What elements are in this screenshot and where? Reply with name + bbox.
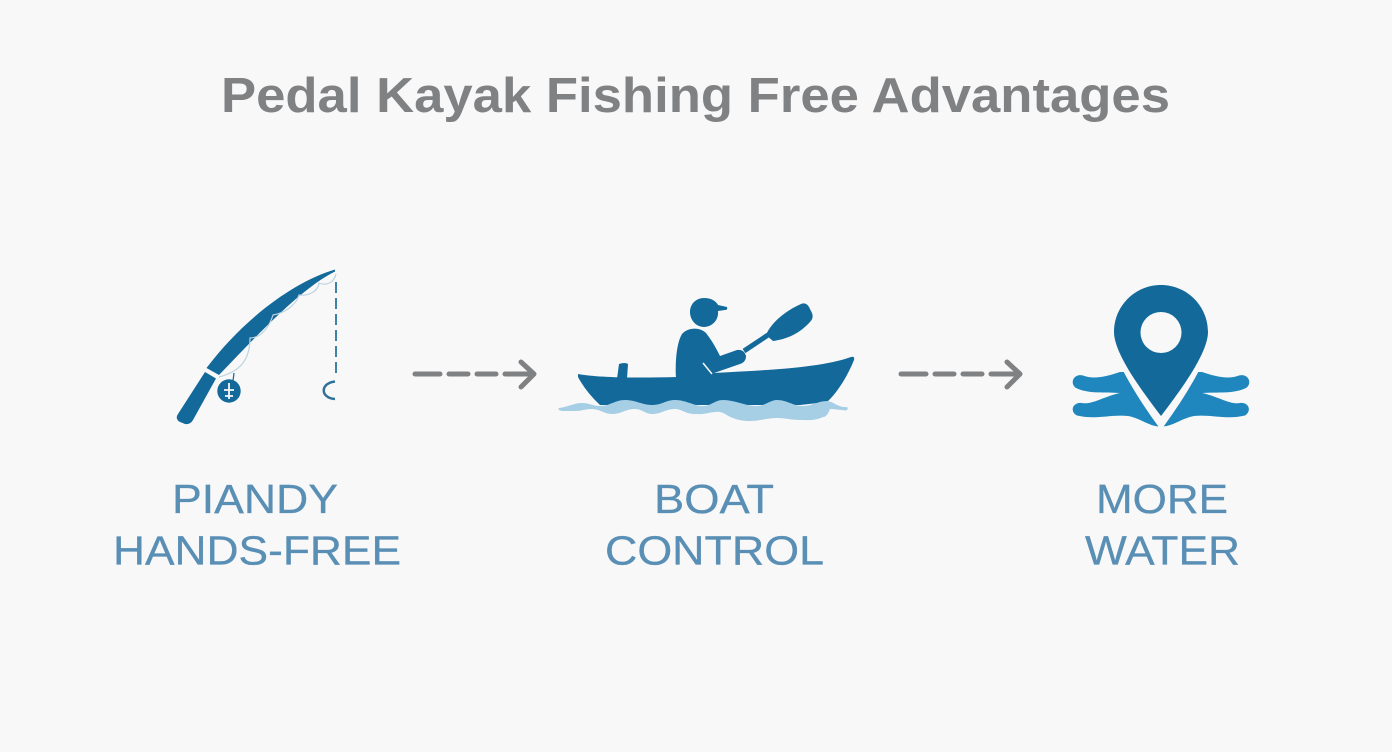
label: piandy hands-free: PIANDY <box>172 476 338 522</box>
label: boat control: CONTROL <box>605 528 824 574</box>
arrow: rod to boat <box>415 362 534 387</box>
label: piandy hands-free: HANDS-FREE <box>113 528 401 574</box>
label: piandy hands-free <box>113 476 401 574</box>
paddler <box>690 298 727 327</box>
seat back <box>617 363 628 379</box>
label: boat control <box>605 476 824 574</box>
label: boat control: BOAT <box>654 476 774 522</box>
waves <box>1073 372 1249 427</box>
arrow: boat to water <box>901 362 1020 387</box>
label: more water: MORE <box>1096 476 1228 522</box>
label: more water <box>1085 476 1240 574</box>
hull <box>578 357 854 405</box>
icon: location pin over water <box>1073 282 1249 427</box>
title: Pedal Kayak Fishing Free Advantages <box>221 69 1170 123</box>
pin <box>1114 285 1208 416</box>
pin halo <box>1113 282 1209 425</box>
icon: fishing rod <box>177 270 336 424</box>
water band <box>558 400 848 421</box>
icon: kayak with paddler <box>558 298 854 421</box>
label: more water: WATER <box>1085 528 1240 574</box>
paddle <box>744 335 768 351</box>
